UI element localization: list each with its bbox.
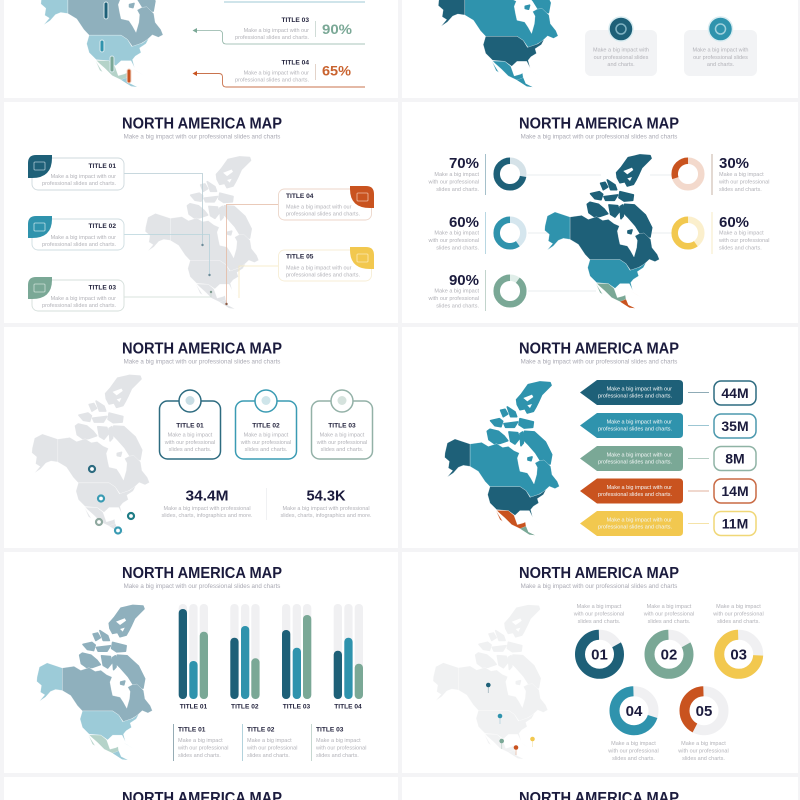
panel: title cards and stats bbox=[4, 327, 398, 548]
text block: title 02: TITLE 02 bbox=[247, 726, 275, 734]
callout: title 01: professional slides and charts. bbox=[42, 181, 116, 187]
heading: NORTH AMERICA MAP bbox=[122, 116, 282, 132]
row: 11M: Make a big impact with our bbox=[607, 518, 672, 524]
stat: 60% teal: with our professional bbox=[428, 238, 479, 244]
donut: 03: slides and charts. bbox=[717, 619, 760, 625]
callout: title 04 bbox=[278, 186, 374, 220]
donut: 02: 02 bbox=[661, 646, 677, 664]
stat: 60% teal: Make a big impact bbox=[434, 230, 479, 236]
item: title 04: Make a big impact with our bbox=[244, 70, 309, 76]
item: title 03: TITLE 03 bbox=[282, 17, 309, 24]
card 2 bbox=[684, 17, 757, 76]
donut: 01: Make a big impact bbox=[577, 604, 622, 610]
stat: 60% teal: 60% bbox=[449, 214, 479, 231]
stat: 90% bbox=[428, 270, 523, 311]
donut: 03: with our professional bbox=[712, 612, 764, 618]
bar group: title 02 bbox=[230, 604, 260, 710]
card: title 03: Make a big impact bbox=[320, 432, 365, 438]
heading: NORTH AMERICA MAP bbox=[519, 116, 679, 132]
donut: 05: slides and charts. bbox=[682, 756, 725, 762]
callout: title 01: TITLE 01 bbox=[89, 163, 116, 170]
callout: title 02 bbox=[28, 216, 124, 250]
callout: title 03: Make a big impact with our bbox=[51, 296, 116, 302]
map: dark with coloured south bbox=[545, 155, 659, 308]
callout: title 01: Make a big impact with our bbox=[51, 174, 116, 180]
heading: Make a big impact with our professional slides and charts bbox=[521, 358, 677, 366]
stat: 34.4M: 34.4M bbox=[186, 488, 228, 504]
text block: title 03: Make a big impact bbox=[316, 738, 361, 744]
row: 14M: Make a big impact with our bbox=[607, 485, 672, 491]
stat: 70%: 70% bbox=[449, 155, 479, 172]
callout: title 04: professional slides and charts. bbox=[286, 212, 360, 218]
stat: 90%: slides and charts. bbox=[436, 304, 479, 310]
donut: 03: 03 bbox=[730, 646, 747, 664]
row: 11M: 11M bbox=[722, 516, 748, 532]
card 2: and charts. bbox=[707, 62, 735, 68]
heading bbox=[122, 565, 282, 590]
heading: NORTH AMERICA MAP bbox=[122, 565, 282, 582]
item: title 04 bbox=[192, 60, 365, 87]
text block: title 03: with our professional bbox=[315, 746, 366, 752]
text block: title 02: with our professional bbox=[246, 746, 297, 752]
callout: title 05: professional slides and charts. bbox=[286, 272, 360, 278]
stat: 60% yellow: with our professional bbox=[718, 238, 769, 244]
stat: 60% teal: slides and charts. bbox=[436, 246, 479, 252]
callout: title 05: Make a big impact with our bbox=[286, 266, 352, 272]
stat: 90%: Make a big impact bbox=[434, 288, 479, 294]
donut: 05: Make a big impact bbox=[681, 741, 726, 747]
card: title 03 bbox=[312, 390, 372, 459]
text block: title 02: slides and charts. bbox=[247, 753, 290, 759]
donut: 02: slides and charts. bbox=[648, 619, 691, 625]
stat: 54.3K bbox=[280, 488, 372, 519]
text block: title 03: TITLE 03 bbox=[316, 726, 344, 734]
bar group: title 01: TITLE 01 bbox=[180, 704, 208, 710]
panel: numbered donuts bbox=[402, 552, 798, 773]
card: title 02: TITLE 02 bbox=[252, 422, 280, 430]
row: 44M bbox=[580, 380, 756, 405]
stat: 70%: slides and charts. bbox=[436, 187, 479, 193]
text block: title 01 bbox=[174, 724, 228, 761]
card 1: our professional slides bbox=[594, 55, 649, 61]
stat: 60% yellow: slides and charts. bbox=[719, 246, 762, 252]
row: 44M: Make a big impact with our bbox=[607, 386, 672, 392]
heading: Make a big impact with our professional slides and charts bbox=[124, 134, 280, 140]
map: pale with pins bbox=[433, 606, 548, 759]
stat: 54.3K: 54.3K bbox=[306, 488, 346, 504]
row: 44M: 44M bbox=[721, 385, 749, 401]
donut: 01: slides and charts. bbox=[578, 619, 621, 625]
card: title 03: with our professional bbox=[316, 440, 367, 446]
donut: 05 bbox=[677, 691, 729, 762]
stat: 30%: 30% bbox=[719, 155, 749, 172]
callout: title 02: TITLE 02 bbox=[89, 223, 116, 230]
panel: top left, map with percentages bbox=[4, 0, 398, 98]
heading bbox=[519, 116, 679, 140]
heading: Make a big impact with our professional slides and charts bbox=[124, 358, 280, 366]
donut: 02: Make a big impact bbox=[647, 604, 692, 610]
map: grey bbox=[145, 157, 259, 309]
card: title 01: Make a big impact bbox=[168, 432, 213, 438]
stat: 90%: 90% bbox=[449, 272, 479, 289]
donut: 03 bbox=[712, 604, 764, 674]
card: title 03: slides and charts. bbox=[321, 447, 364, 453]
card 1: and charts. bbox=[607, 62, 635, 68]
panel: bar chart with map bbox=[4, 552, 398, 773]
callout: title 05: TITLE 05 bbox=[286, 254, 314, 260]
connector lines bbox=[527, 175, 672, 291]
row: 14M bbox=[580, 478, 756, 504]
heading bbox=[122, 116, 282, 140]
donut: 04 bbox=[607, 691, 659, 762]
stat: 30%: with our professional bbox=[718, 180, 769, 186]
panel: donut percentages around map bbox=[402, 102, 798, 323]
stat: 54.3K: slides, charts, infographics and more. bbox=[280, 513, 372, 519]
stat: 60% yellow: Make a big impact bbox=[719, 230, 764, 236]
callout: title 01 bbox=[28, 155, 124, 190]
heading: NORTH AMERICA MAP bbox=[519, 565, 679, 582]
bar group: title 01 bbox=[179, 604, 208, 710]
card 1: Make a big impact with bbox=[593, 48, 649, 54]
item: title 03 bbox=[192, 17, 365, 44]
callout: title 03: TITLE 03 bbox=[89, 284, 116, 292]
item: title 03: Make a big impact with our bbox=[244, 28, 309, 34]
stat: 30%: Make a big impact bbox=[719, 172, 764, 178]
text block: title 01: Make a big impact bbox=[178, 738, 223, 744]
panel: bottom right, heading only bbox=[402, 777, 798, 800]
callout: title 04: Make a big impact with our bbox=[286, 204, 352, 210]
heading: Make a big impact with our professional slides and charts bbox=[124, 583, 280, 590]
text block: title 01: slides and charts. bbox=[178, 753, 221, 759]
heading: NORTH AMERICA MAP bbox=[122, 340, 282, 358]
item: title 04: TITLE 04 bbox=[282, 60, 309, 66]
card: title 02: with our professional bbox=[240, 440, 291, 446]
card: title 02: Make a big impact bbox=[244, 432, 289, 438]
callout: title 03 bbox=[28, 277, 124, 311]
stat: 70%: Make a big impact bbox=[434, 172, 479, 178]
leader lines bbox=[124, 174, 278, 305]
item: title 03: professional slides and charts. bbox=[235, 35, 309, 41]
donut: 03: Make a big impact bbox=[716, 604, 761, 610]
map: light blue bbox=[37, 605, 152, 760]
donut: 01: with our professional bbox=[573, 612, 624, 618]
panel: callouts on grey map bbox=[4, 102, 398, 323]
bar group: title 03: TITLE 03 bbox=[283, 704, 311, 710]
text block: title 03: slides and charts. bbox=[316, 753, 359, 759]
card 2: Make a big impact with bbox=[693, 48, 748, 54]
panel: arrow labels with values bbox=[402, 327, 798, 548]
stat: 34.4M: Make a big impact with professional bbox=[163, 506, 251, 512]
stat: 60% yellow: 60% bbox=[719, 214, 749, 231]
map: grey with ring markers bbox=[32, 375, 149, 534]
donut: 02: with our professional bbox=[643, 612, 694, 618]
row: 8M: 8M bbox=[725, 450, 745, 466]
bar group: title 04: TITLE 04 bbox=[334, 704, 362, 710]
donut: 04: slides and charts. bbox=[612, 756, 655, 762]
map: teal regions bbox=[438, 0, 558, 87]
stat: 30% bbox=[675, 154, 769, 195]
row: 35M: professional slides and charts. bbox=[598, 426, 672, 432]
row: 35M: Make a big impact with our bbox=[607, 420, 672, 426]
stat: 60% teal bbox=[428, 212, 523, 254]
stat: 34.4M: slides, charts, infographics and more. bbox=[161, 513, 253, 519]
leader line from previous item bbox=[224, 1, 365, 3]
item: title 04: 65% bbox=[322, 62, 352, 78]
stat: 70% bbox=[428, 154, 523, 195]
donut: 01: 01 bbox=[591, 646, 608, 664]
text block: title 01: TITLE 01 bbox=[178, 726, 206, 734]
donut: 04: 04 bbox=[626, 703, 643, 720]
stat: 70%: with our professional bbox=[428, 180, 479, 186]
map: light blue regions with pins bbox=[41, 0, 163, 87]
stat: 60% yellow bbox=[675, 212, 769, 254]
row: 35M: 35M bbox=[721, 418, 749, 434]
heading bbox=[519, 565, 679, 590]
donut: 01 bbox=[573, 604, 624, 674]
panel: bottom left, heading only bbox=[4, 777, 398, 800]
card: title 02 bbox=[236, 390, 296, 459]
row: 8M: professional slides and charts. bbox=[598, 460, 672, 466]
stat: 34.4M bbox=[161, 488, 253, 519]
stat: 90%: with our professional bbox=[428, 296, 479, 302]
bar group: title 03 bbox=[282, 604, 311, 710]
item: title 04: professional slides and charts. bbox=[235, 78, 309, 84]
donut: 04: Make a big impact bbox=[611, 741, 656, 747]
donut: 05: 05 bbox=[696, 703, 712, 720]
text block: title 03 bbox=[312, 724, 366, 761]
card: title 01: TITLE 01 bbox=[176, 422, 204, 430]
card: title 01 bbox=[160, 390, 220, 459]
heading bbox=[122, 340, 282, 366]
donut: 04: with our professional bbox=[607, 748, 659, 754]
row: 14M: professional slides and charts. bbox=[598, 492, 672, 498]
item: title 03: 90% bbox=[322, 21, 353, 37]
card: title 03: TITLE 03 bbox=[328, 422, 356, 430]
callout: title 05 bbox=[278, 247, 374, 281]
callout: title 03: professional slides and charts. bbox=[42, 303, 116, 309]
card: title 01: slides and charts. bbox=[169, 447, 212, 453]
heading: Make a big impact with our professional slides and charts bbox=[521, 134, 677, 140]
heading bbox=[519, 340, 679, 366]
card: title 02: slides and charts. bbox=[245, 447, 288, 453]
row: 35M bbox=[580, 413, 756, 438]
bar group: title 02: TITLE 02 bbox=[231, 704, 259, 710]
panel: top right, map with icon cards bbox=[402, 0, 798, 98]
row: 8M bbox=[580, 446, 756, 471]
callout: title 02: professional slides and charts. bbox=[42, 242, 116, 248]
heading: Make a big impact with our professional slides and charts bbox=[521, 583, 677, 590]
text block: title 02: Make a big impact bbox=[247, 738, 292, 744]
card: title 01: with our professional bbox=[164, 440, 215, 446]
donut: 05: with our professional bbox=[677, 748, 729, 754]
text block: title 01: with our professional bbox=[177, 746, 228, 752]
card 2: our professional slides bbox=[693, 55, 748, 61]
map: teal with orange mexico bbox=[445, 382, 559, 535]
card 1 bbox=[585, 17, 657, 76]
bar group: title 04 bbox=[334, 604, 363, 710]
row: 11M bbox=[580, 511, 756, 536]
callout: title 04: TITLE 04 bbox=[286, 193, 314, 200]
row: 44M: professional slides and charts. bbox=[598, 394, 672, 400]
stat: 30%: slides and charts. bbox=[719, 187, 762, 193]
heading: NORTH AMERICA MAP bbox=[519, 340, 679, 358]
donut: 02 bbox=[643, 604, 694, 674]
callout: title 02: Make a big impact with our bbox=[51, 235, 116, 241]
row: 11M: professional slides and charts. bbox=[598, 524, 672, 530]
row: 14M: 14M bbox=[721, 483, 749, 499]
row: 8M: Make a big impact with our bbox=[607, 452, 672, 458]
text block: title 02 bbox=[242, 724, 297, 761]
stat: 54.3K: Make a big impact with professional bbox=[282, 506, 370, 512]
